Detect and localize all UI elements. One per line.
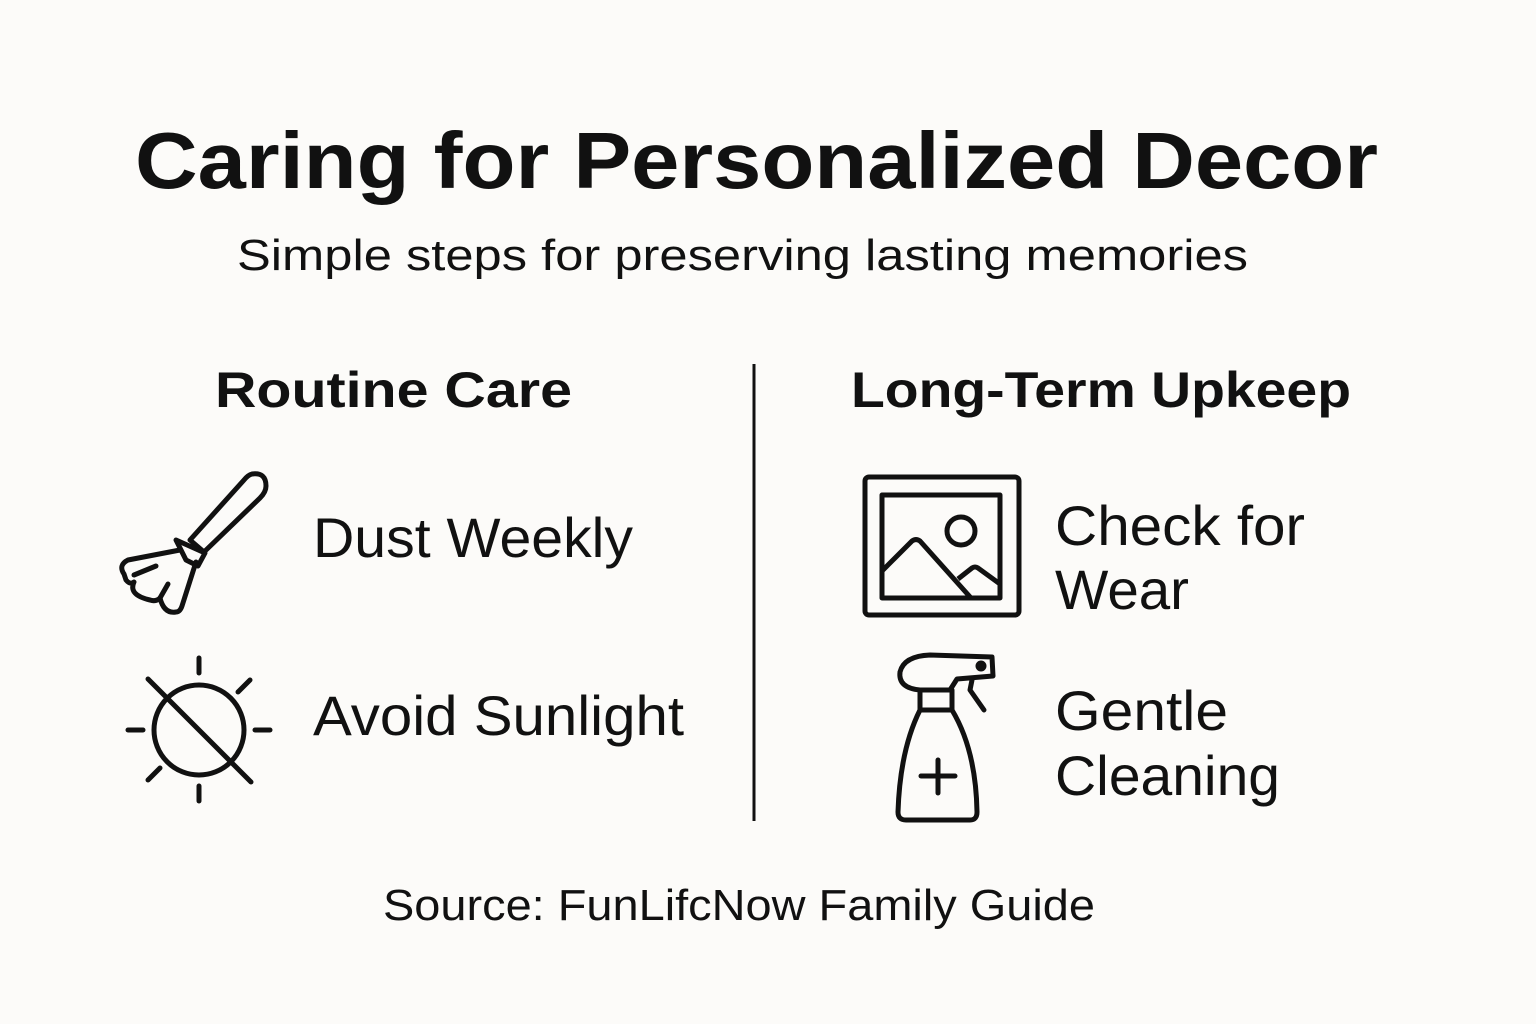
icon: duster bbox=[122, 474, 266, 612]
icon: picture frame bbox=[865, 477, 1019, 615]
panel: long-term upkeep bbox=[851, 362, 1351, 820]
subtitle: Simple steps for preserving lasting memories bbox=[237, 231, 1248, 280]
text: avoid sunlight: Avoid Sunlight bbox=[313, 684, 684, 747]
text: dust weekly: Dust Weekly bbox=[313, 506, 633, 569]
divider bbox=[752, 364, 756, 821]
heading: long-term upkeep: Long-Term Upkeep bbox=[851, 362, 1351, 418]
text: gentle cleaning: Gentle bbox=[1055, 679, 1228, 742]
panel: long-term upkeep: Wear bbox=[1055, 558, 1189, 621]
source: Source: FunLifcNow Family Guide bbox=[383, 881, 1095, 930]
heading: routine care: Routine Care bbox=[215, 362, 572, 418]
icon: spray bottle bbox=[898, 655, 993, 820]
title: Caring for Personalized Decor bbox=[135, 116, 1378, 205]
panel: long-term upkeep: Cleaning bbox=[1055, 744, 1280, 807]
text: check for wear: Check for bbox=[1055, 494, 1305, 557]
icon: no sun bbox=[128, 658, 270, 801]
panel: routine care bbox=[122, 362, 684, 801]
